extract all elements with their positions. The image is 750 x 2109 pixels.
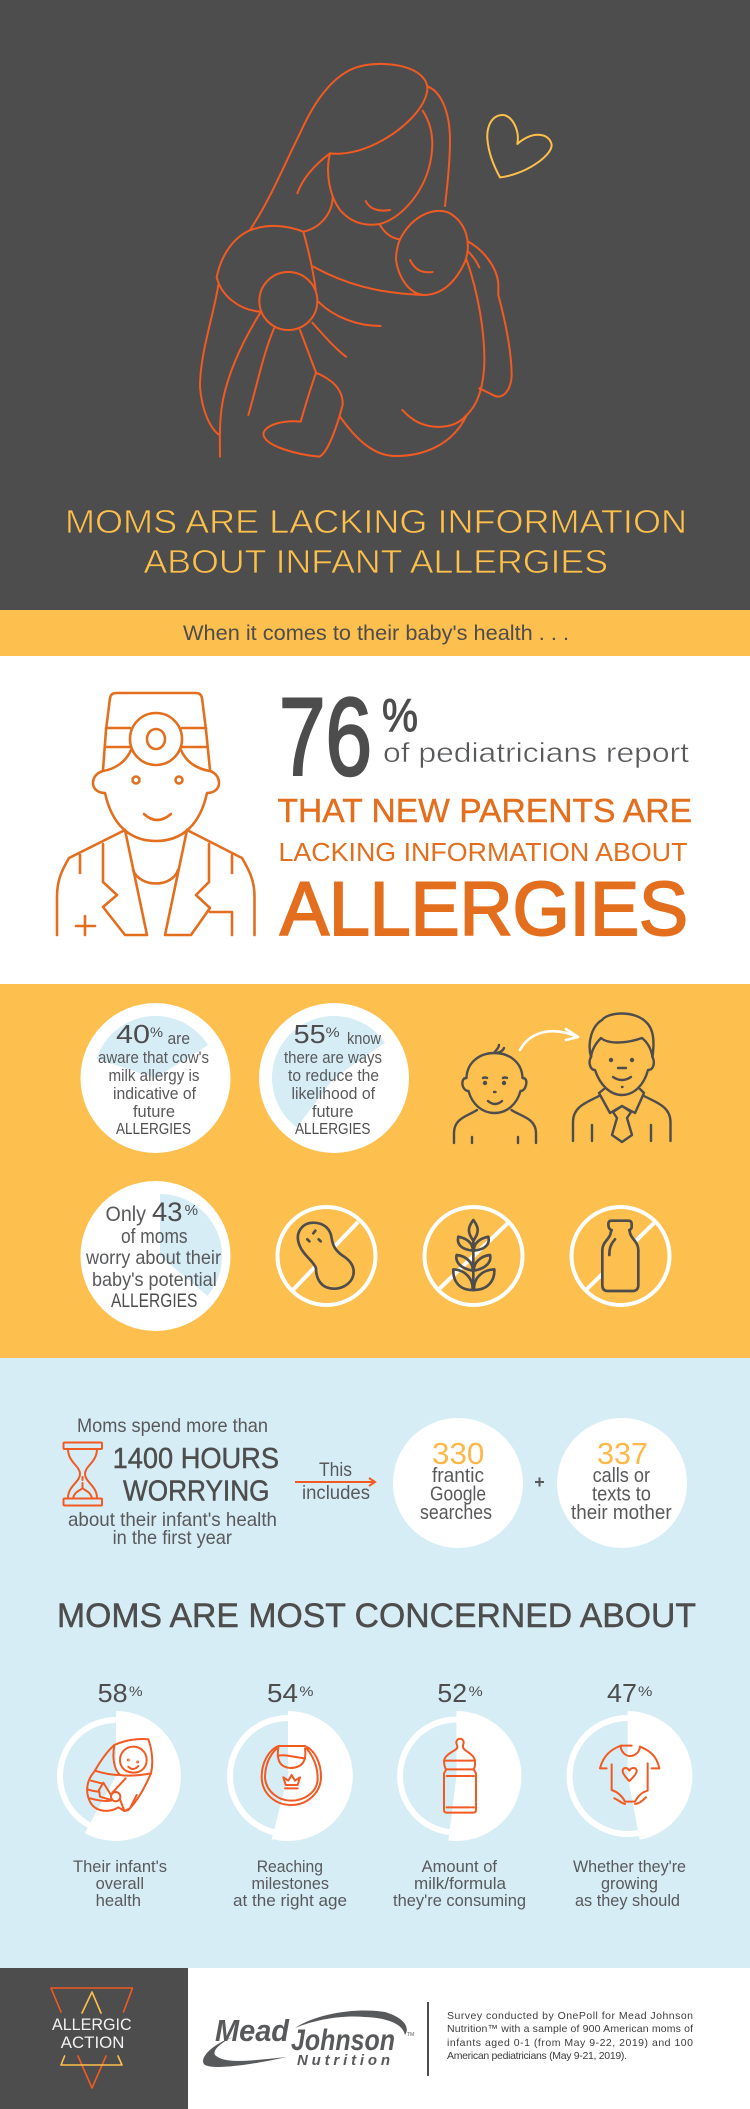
heading: orange statement: THAT NEW PARENTS ARE bbox=[278, 793, 692, 830]
donut: 52% milk: 52 bbox=[437, 1678, 467, 1708]
donut: 54% milestones: at the right age bbox=[233, 1891, 347, 1910]
donut: 58% overall health: 58 bbox=[98, 1678, 128, 1708]
donut: 58% overall health bbox=[60, 1678, 181, 1910]
icon: hourglass bbox=[64, 1442, 102, 1506]
heading: orange statement: ALLERGIES bbox=[280, 867, 688, 952]
stat circle: 43%: ALLERGIES bbox=[111, 1291, 197, 1312]
icon: doctor bbox=[57, 693, 254, 935]
text block: 1400 hours: about their infant's health bbox=[68, 1509, 277, 1531]
stat circle: 40%: milk allergy is bbox=[108, 1067, 200, 1085]
stat circle: 40%: aware that cow's bbox=[98, 1049, 209, 1067]
panel: pediatricians statistic bbox=[57, 676, 692, 952]
text block: survey note: Nutrition™ with a sample of 900 American moms of bbox=[447, 2023, 693, 2035]
stat circle: 43%: worry about their bbox=[85, 1247, 221, 1269]
donut: 54% milestones: milestones bbox=[252, 1874, 329, 1893]
text block: 1400 hours: WORRYING bbox=[123, 1476, 270, 1508]
donut: 47% growing: as they should bbox=[575, 1891, 680, 1910]
logo: Mead Johnson Nutrition: TM bbox=[407, 2032, 414, 2038]
icon: adult man bbox=[573, 1014, 670, 1142]
donut: 54% milestones bbox=[230, 1678, 353, 1910]
stat circle: 40%: future bbox=[133, 1103, 175, 1121]
stat circle: 43% bbox=[80, 1181, 230, 1331]
stat circle: 40%: are bbox=[168, 1029, 190, 1048]
divider bbox=[427, 2002, 429, 2076]
donut: 47% growing: % bbox=[638, 1683, 652, 1699]
donut: 52% milk: milk/formula bbox=[414, 1874, 507, 1893]
stat circle: 337 calls bbox=[557, 1418, 687, 1548]
donut: 54% milestones: 54 bbox=[267, 1678, 298, 1708]
icon: heart bbox=[487, 115, 552, 177]
donut: 58% overall health: overall bbox=[96, 1874, 144, 1893]
logo: Allergic Action: ALLERGIC bbox=[52, 2015, 132, 2034]
stat circle: 55%: % bbox=[326, 1024, 340, 1040]
donut: 58% overall health: % bbox=[129, 1683, 143, 1699]
icon: baby bbox=[454, 1045, 536, 1143]
icon: no milk bbox=[572, 1207, 670, 1305]
panel: footer bbox=[0, 1968, 750, 2109]
stat circle: 40%: indicative of bbox=[113, 1085, 196, 1103]
stat circle: 55%: likelihood of bbox=[292, 1085, 375, 1103]
icon: no wheat bbox=[424, 1207, 522, 1305]
logo: Allergic Action bbox=[0, 1968, 188, 2109]
stat circle: 55%: to reduce the bbox=[288, 1067, 379, 1085]
stat circle: 43%: baby's potential bbox=[92, 1269, 217, 1291]
stat circle: 55%: 55 bbox=[294, 1019, 326, 1049]
illustration: mother holding baby bbox=[200, 64, 512, 457]
stat circle: 40%: % bbox=[150, 1024, 163, 1040]
subtitle band bbox=[0, 610, 750, 656]
stat circle: 43%: 43 bbox=[152, 1197, 182, 1227]
panel: light blue section bbox=[0, 1358, 750, 1968]
text block: 1400 hours: Moms spend more than bbox=[77, 1415, 268, 1437]
stat circle: 40%: ALLERGIES bbox=[116, 1121, 191, 1138]
icon: no peanuts bbox=[278, 1207, 376, 1305]
icon: bib bbox=[262, 1746, 321, 1805]
stat circle: 330 searches bbox=[393, 1418, 523, 1548]
arrow: baby to adult bbox=[520, 1029, 578, 1050]
stat circle: 43%: of moms bbox=[121, 1226, 188, 1248]
title: MOMS ARE LACKING INFORMATION bbox=[65, 503, 687, 540]
text block: survey note bbox=[447, 2010, 693, 2062]
stat circle: 55%: ALLERGIES bbox=[295, 1121, 370, 1138]
donut: 54% milestones: Reaching bbox=[257, 1857, 323, 1876]
donut: 52% milk: they're consuming bbox=[393, 1891, 526, 1910]
stat circle: 43%: % bbox=[185, 1202, 198, 1219]
big number: % bbox=[382, 689, 418, 741]
icon: swaddled baby bbox=[87, 1739, 152, 1811]
donut: 47% growing bbox=[570, 1678, 692, 1910]
title bbox=[65, 503, 687, 580]
text block: 1400 hours bbox=[68, 1415, 279, 1549]
text block: 1400 hours: in the first year bbox=[113, 1527, 232, 1549]
donut: 52% milk: Amount of bbox=[422, 1857, 497, 1876]
donut: 47% growing: 47 bbox=[607, 1678, 637, 1708]
icon: baby bottle bbox=[444, 1739, 476, 1813]
text block: survey note: American pediatricians (May 9-21, 2019). bbox=[447, 2050, 627, 2062]
stat circle: 55%: future bbox=[312, 1103, 354, 1121]
stat circle: 330 searches: Google bbox=[430, 1484, 486, 1506]
stat circle: 43%: Only bbox=[106, 1203, 146, 1226]
stat circle: 337 calls: calls or bbox=[593, 1465, 650, 1487]
subtitle band: When it comes to their baby's health . . . bbox=[183, 622, 569, 645]
donut: 58% overall health: Their infant's bbox=[73, 1857, 167, 1876]
arrow: this includes bbox=[295, 1460, 375, 1504]
logo: Mead Johnson Nutrition: Mead bbox=[215, 2013, 290, 2048]
logo: Mead Johnson Nutrition: Johnson bbox=[291, 2024, 395, 2057]
stat circle: 337 calls: 337 bbox=[597, 1436, 648, 1471]
icon: onesie bbox=[600, 1746, 659, 1804]
stat circle: 330 searches: searches bbox=[420, 1502, 492, 1524]
big number: 76 bbox=[279, 676, 372, 799]
text block: 1400 hours: 1400 HOURS bbox=[113, 1443, 279, 1475]
stat circle: 337 calls: their mother bbox=[571, 1502, 672, 1524]
logo: Mead Johnson Nutrition bbox=[203, 2011, 414, 2069]
donut: 52% milk bbox=[393, 1678, 526, 1910]
stat circle: 337 calls: texts to bbox=[592, 1484, 651, 1506]
stat circle: 330 searches: frantic bbox=[432, 1465, 484, 1487]
heading: orange statement: LACKING INFORMATION ABOUT bbox=[278, 839, 688, 867]
title: ABOUT INFANT ALLERGIES bbox=[144, 543, 608, 580]
donut: 47% growing: Whether they're bbox=[573, 1857, 686, 1876]
stat circle: 55%: there are ways bbox=[284, 1049, 382, 1067]
donut: 47% growing: growing bbox=[601, 1874, 658, 1893]
panel: yellow statistics bbox=[0, 984, 750, 1358]
donut: 58% overall health: health bbox=[96, 1891, 141, 1910]
text block: survey note: infants aged 0-1 (from May 9-22, 2019) and 100 bbox=[447, 2037, 693, 2049]
text block: survey note: Survey conducted by OnePoll for Mead Johnson bbox=[447, 2010, 693, 2022]
stat circle: 55%: know bbox=[347, 1029, 382, 1048]
logo: Mead Johnson Nutrition: Nutrition bbox=[297, 2052, 390, 2069]
stat circle: 330 searches: 330 bbox=[432, 1436, 484, 1471]
stat circle: 40% bbox=[80, 1003, 230, 1153]
heading: orange statement bbox=[278, 793, 692, 952]
donut: 54% milestones: % bbox=[299, 1683, 314, 1699]
arrow: this includes: includes bbox=[302, 1483, 370, 1504]
panel: hero bbox=[0, 0, 750, 610]
arrow: this includes: This bbox=[319, 1460, 352, 1481]
plus sign bbox=[535, 1478, 544, 1486]
stat circle: 40%: 40 bbox=[116, 1019, 150, 1049]
stat circle: 55% bbox=[259, 1003, 409, 1153]
heading: concerns: MOMS ARE MOST CONCERNED ABOUT bbox=[57, 1597, 696, 1635]
donut: 52% milk: % bbox=[469, 1683, 483, 1699]
text: of pediatricians report: of pediatricians report bbox=[383, 737, 689, 768]
logo: Allergic Action: ACTION bbox=[61, 2033, 124, 2052]
